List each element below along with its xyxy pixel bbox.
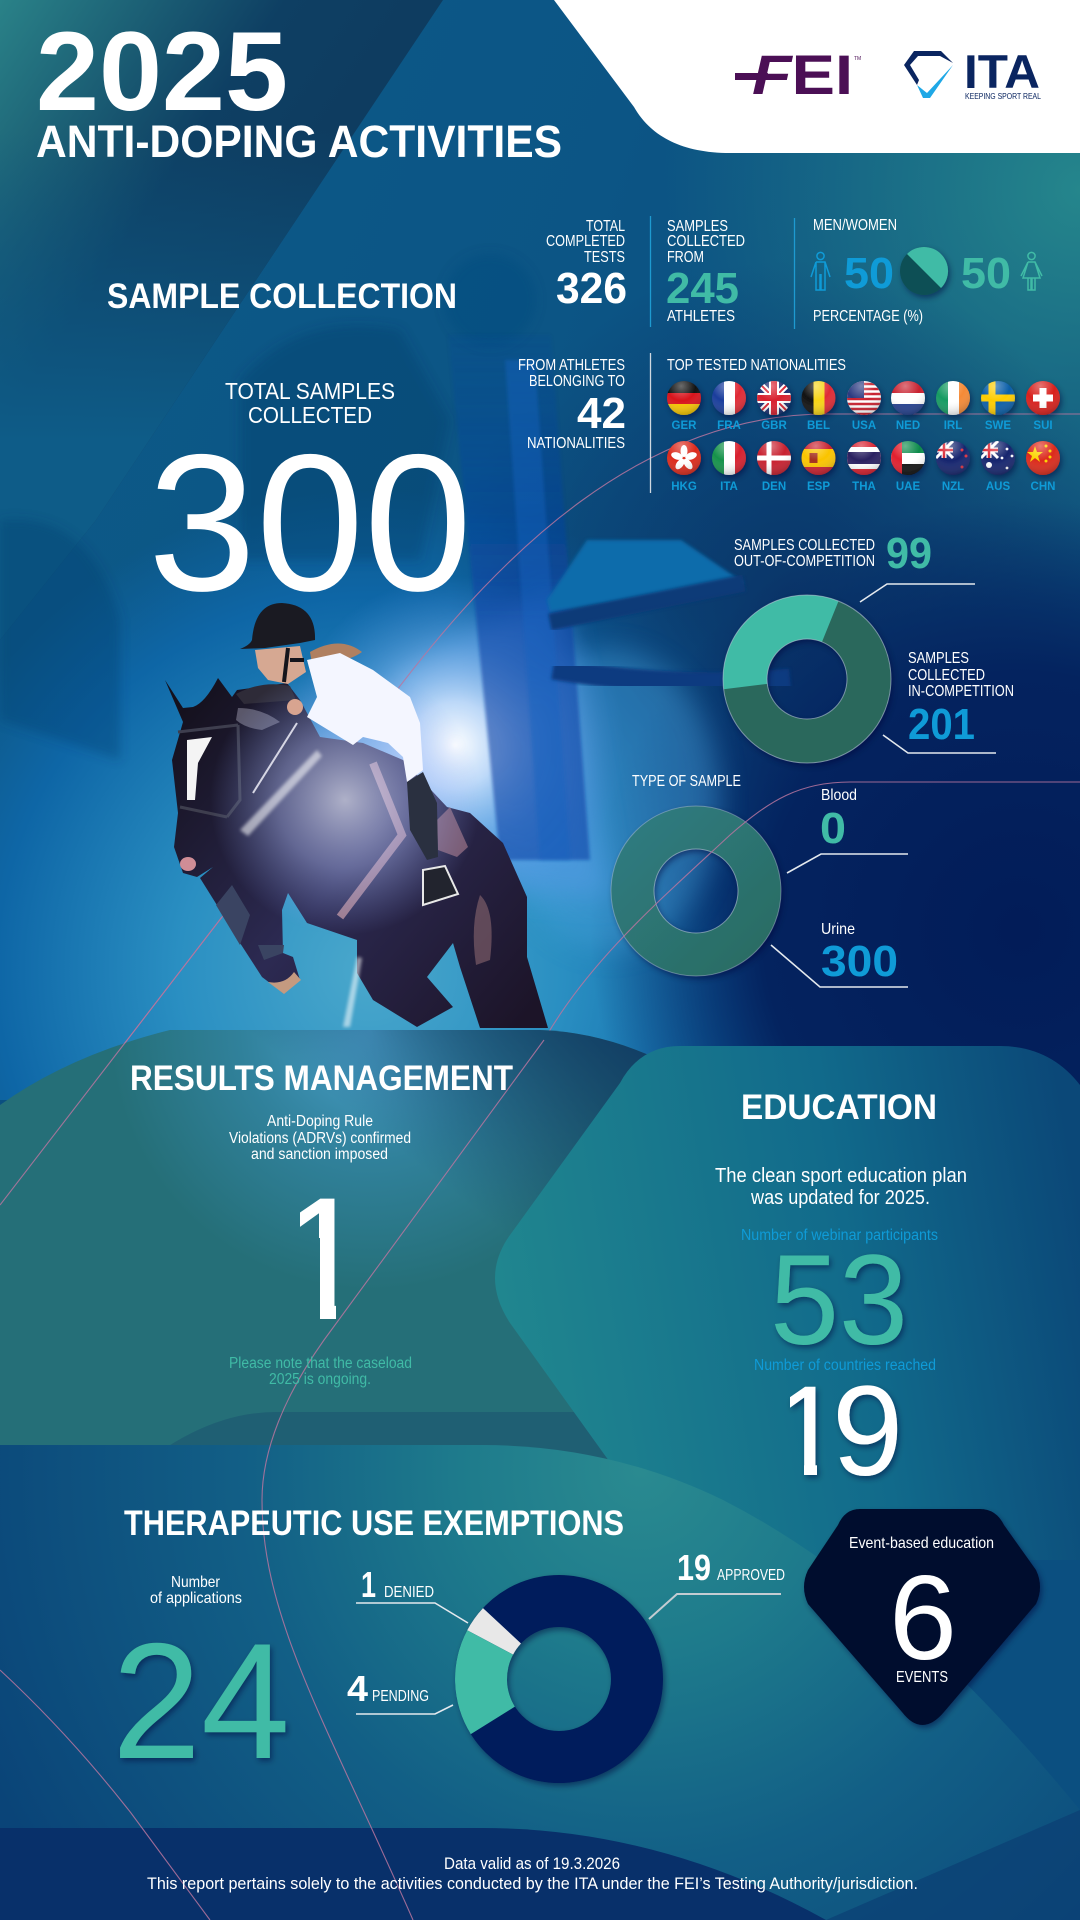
panel: dark overlap band — [103, 1412, 760, 1500]
label: in competition: 201 — [908, 700, 975, 749]
rider face — [255, 646, 306, 684]
label: approved: 19 — [677, 1547, 711, 1588]
panel: footer background — [0, 1828, 826, 1920]
label: approved: APPROVED — [717, 1567, 785, 1584]
panel: event-based education: Event-based education — [849, 1535, 994, 1552]
horse neck highlight — [236, 708, 280, 730]
footer note — [147, 1854, 918, 1893]
stat: samples collected from athletes: COLLECTED — [667, 233, 745, 250]
label: in competition — [883, 650, 1014, 753]
stat: men and women percentage: 50 — [844, 249, 894, 298]
big number: total samples collected: TOTAL SAMPLES — [225, 378, 395, 404]
flag: UAE: UAE — [896, 481, 920, 493]
label: out of competition: 99 — [886, 529, 932, 578]
footer note: This report pertains solely to the activities conducted by the ITA under the FEI’s Testing Authority/jurisdiction. — [147, 1874, 918, 1893]
icon: man — [811, 252, 830, 290]
stat: total completed tests: TESTS — [584, 249, 625, 266]
label: denied: 1 — [361, 1564, 376, 1605]
light rays — [240, 750, 362, 1027]
white logo panel — [554, 0, 1080, 153]
divider — [650, 216, 794, 329]
flag: SWE: SWE — [985, 420, 1011, 432]
bridle — [178, 725, 240, 817]
segment: out of competition — [723, 595, 838, 689]
logo: FEI: FEI — [752, 43, 853, 106]
label: pending — [347, 1668, 453, 1714]
flag: NED: NED — [896, 420, 920, 432]
flag: GER — [667, 381, 701, 432]
section: results management: 2025 is ongoing. — [269, 1371, 371, 1388]
saddle pad — [437, 807, 468, 857]
chart: competition donut — [723, 595, 891, 763]
stat: total completed tests: 326 — [556, 264, 627, 313]
label: blood — [787, 787, 908, 873]
flag: CHN: CHN — [1031, 481, 1055, 493]
section: therapeutic use exemptions — [112, 1504, 624, 1793]
section: results management: Anti-Doping Rule — [267, 1113, 373, 1130]
stirrup and foot — [423, 866, 458, 905]
section: education: 1 — [772, 1360, 843, 1503]
stat: nationalities: NATIONALITIES — [527, 435, 625, 452]
label: approved — [649, 1547, 785, 1619]
logo: ITA — [904, 45, 1041, 101]
stat: men and women percentage: PERCENTAGE (%) — [813, 308, 923, 325]
section: results management: Violations (ADRVs) confirmed — [229, 1130, 411, 1147]
label: pending: 4 — [347, 1668, 368, 1709]
section: education: EDUCATION — [741, 1088, 937, 1127]
stat: total completed tests — [546, 218, 627, 313]
label: out of competition: SAMPLES COLLECTED — [734, 537, 875, 554]
background photo: rosette and ribbons — [1, 329, 792, 952]
flag: USA — [847, 381, 881, 432]
panel: therapeutic use exemptions background — [0, 1445, 1080, 1920]
girth strap — [340, 763, 402, 917]
rider hand — [287, 699, 303, 715]
icon: woman — [1021, 252, 1042, 290]
stat: nationalities — [518, 357, 626, 452]
panel: education background — [495, 1046, 1080, 1560]
flag: IRL — [936, 381, 970, 432]
flag: ITA: ITA — [720, 481, 738, 493]
flag: SUI: SUI — [1033, 420, 1053, 432]
stat: samples collected from athletes: SAMPLES — [667, 218, 728, 235]
heading: sample collection: SAMPLE COLLECTION — [107, 277, 457, 316]
background — [0, 0, 1080, 1120]
flag: BEL — [802, 381, 836, 432]
stat: samples collected from athletes: FROM — [667, 249, 704, 266]
flag: ESP — [802, 441, 836, 493]
pink curve behind photo — [0, 414, 1080, 1205]
stat: total completed tests: TOTAL — [586, 218, 625, 235]
label: urine — [771, 921, 908, 987]
section: therapeutic use exemptions: of applications — [150, 1590, 242, 1607]
photo: horse and rider — [165, 603, 548, 1028]
logo: ITA: ITA — [964, 45, 1040, 98]
segment: denied — [467, 1608, 521, 1655]
label: out of competition: OUT-OF-COMPETITION — [734, 553, 875, 570]
stat: nationalities: BELONGING TO — [529, 373, 625, 390]
section: results management — [130, 1059, 513, 1388]
section: education: 9 — [832, 1360, 903, 1503]
section: results management: Please note that the caseload — [229, 1355, 412, 1372]
stat: nationalities: 42 — [577, 389, 626, 438]
chart: type of sample donut — [611, 773, 781, 976]
logo: FEI: TM — [854, 56, 861, 62]
horse hindquarter highlight — [474, 895, 492, 965]
label: denied: DENIED — [384, 1584, 434, 1601]
big number: total samples collected: COLLECTED — [248, 402, 372, 428]
segment: pending — [455, 1630, 515, 1734]
section: education: The clean sport education plan — [715, 1165, 967, 1187]
stat: samples collected from athletes: 245 — [666, 264, 739, 313]
section: education: 53 — [770, 1229, 908, 1372]
flag: SUI — [1026, 381, 1060, 432]
flag: THA: THA — [852, 481, 876, 493]
label: blood: 0 — [820, 804, 846, 853]
big number: total samples collected: 300 — [148, 414, 472, 632]
stat: samples collected from athletes: ATHLETES — [667, 308, 735, 325]
flag: FRA: FRA — [717, 420, 741, 432]
stat: total completed tests: COMPLETED — [546, 233, 625, 250]
flag: BEL: BEL — [807, 420, 830, 432]
chart: men women pie — [900, 247, 948, 295]
horse hoof — [268, 972, 301, 994]
stat: men and women percentage: MEN/WOMEN — [813, 217, 897, 234]
panel: event-based education — [804, 1509, 1040, 1725]
stat: samples collected from athletes — [666, 218, 745, 325]
flag: UAE — [891, 441, 925, 493]
label: urine: Urine — [821, 921, 855, 938]
flag: NED — [891, 381, 925, 432]
horse silhouette — [165, 678, 548, 1028]
rider helmet — [240, 603, 315, 649]
flag: IRL: IRL — [944, 420, 962, 432]
label: denied — [356, 1564, 468, 1623]
rein — [253, 723, 297, 793]
section: results management: 1 — [275, 1162, 372, 1357]
section: therapeutic use exemptions: THERAPEUTIC USE EXEMPTIONS — [124, 1504, 624, 1543]
flag: HKG: HKG — [671, 481, 697, 493]
helmet strap — [284, 648, 304, 682]
flag: ITA — [712, 441, 746, 493]
flag: NZL: NZL — [942, 481, 964, 493]
decorative curves over panels — [0, 917, 544, 1920]
flag: THA — [847, 441, 881, 493]
background light beam — [390, 590, 610, 900]
panel: event-based education: 6 — [889, 1551, 957, 1685]
flag: GBR: GBR — [761, 420, 787, 432]
horse leg wraps — [216, 885, 284, 960]
label: out of competition — [734, 529, 975, 602]
rider jacket and breeches — [307, 653, 423, 782]
title — [36, 9, 562, 167]
stat: nationalities: FROM ATHLETES — [518, 357, 625, 374]
logo: ITA: KEEPING SPORT REAL — [965, 92, 1041, 101]
flag: GER: GER — [672, 420, 697, 432]
stat: men and women percentage: 50 — [961, 249, 1011, 298]
section: education: was updated for 2025. — [750, 1187, 930, 1209]
flag: USA: USA — [852, 420, 876, 432]
horse mane — [236, 684, 296, 704]
flag: NZL — [936, 441, 970, 493]
label: in competition: SAMPLES — [908, 650, 969, 667]
horse blaze — [187, 737, 212, 800]
flag: SWE — [981, 381, 1015, 432]
flag: AUS — [981, 441, 1015, 493]
rider hair — [310, 644, 362, 664]
stat: men and women percentage — [811, 217, 1042, 325]
title: 2025 — [36, 9, 288, 134]
flag: ESP: ESP — [807, 481, 830, 493]
label: blood: Blood — [821, 787, 857, 804]
pink curve over lower sections — [544, 782, 1080, 1040]
flag: HKG — [667, 441, 701, 493]
light glow over horse — [200, 650, 480, 940]
rider boot — [407, 772, 438, 860]
flag: DEN — [757, 441, 791, 493]
section: education: Number of countries reached — [754, 1357, 936, 1374]
chart: type of sample donut: TYPE OF SAMPLE — [632, 773, 741, 790]
label: in competition: IN-COMPETITION — [908, 683, 1014, 700]
label: urine: 300 — [821, 937, 898, 986]
flag: DEN: DEN — [762, 481, 786, 493]
flag: CHN — [1026, 441, 1060, 493]
panel: results management background — [0, 1030, 700, 1500]
section: therapeutic use exemptions: Number — [171, 1574, 221, 1591]
footer note: Data valid as of 19.3.2026 — [444, 1854, 620, 1873]
flag: FRA — [712, 381, 746, 432]
chart: TUE donut — [455, 1601, 637, 1757]
section: education: Number of webinar participants — [741, 1227, 938, 1244]
horse muzzle — [180, 857, 196, 871]
section: results management: and sanction imposed — [251, 1146, 388, 1163]
title: ANTI-DOPING ACTIVITIES — [36, 116, 562, 167]
label: in competition: COLLECTED — [908, 667, 985, 684]
panel: event-based education: EVENTS — [896, 1669, 948, 1686]
top tested nationalities flags: TOP TESTED NATIONALITIES — [667, 357, 846, 374]
flag: AUS: AUS — [986, 481, 1010, 493]
flag: GBR — [757, 381, 791, 432]
top tested nationalities flags — [667, 357, 1060, 493]
section: therapeutic use exemptions: 24 — [112, 1609, 290, 1793]
section: results management: RESULTS MANAGEMENT — [130, 1059, 513, 1098]
section: education — [715, 1088, 967, 1503]
label: pending: PENDING — [372, 1688, 429, 1705]
